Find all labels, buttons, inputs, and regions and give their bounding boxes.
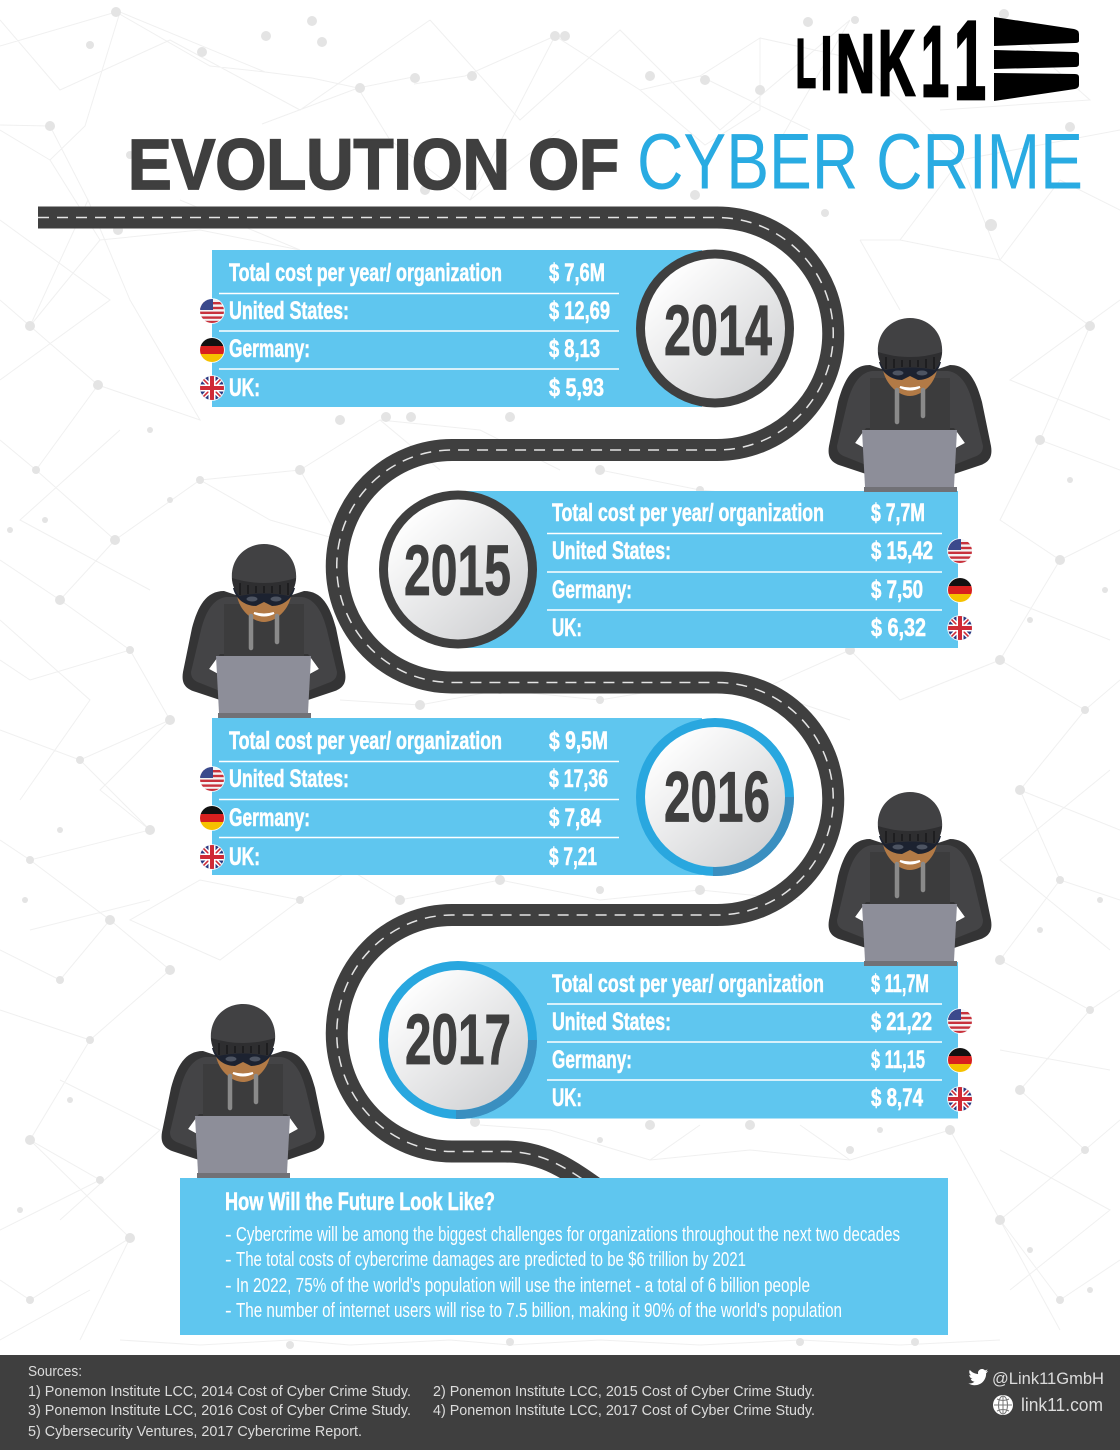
flags — [947, 538, 973, 641]
row dividers — [219, 294, 619, 369]
row: Germany — [229, 804, 601, 832]
row: UK: $ 8,74 — [871, 1084, 923, 1112]
footer — [0, 1355, 1120, 1450]
row: total: $ 11,7M — [871, 970, 929, 998]
panel background — [460, 491, 958, 648]
future panel background — [180, 1178, 948, 1335]
year badge 2014: 2014 — [664, 292, 772, 371]
row: UK: $ 7,21 — [549, 843, 597, 871]
row: UK: UK: — [229, 374, 260, 402]
panel background — [212, 718, 702, 875]
row: total: Total cost per year/ organization — [552, 499, 824, 527]
winding road — [38, 218, 833, 1195]
flags — [199, 766, 225, 870]
title — [128, 116, 1083, 206]
logo wordmark: I — [821, 21, 832, 105]
future bullets: The number of internet users will rise to 7.5 billion, making it 90% of the world's population — [236, 1300, 842, 1322]
website: link11.com — [1021, 1395, 1103, 1415]
icon: globe — [993, 1395, 1013, 1415]
row: UK: $ 5,93 — [549, 374, 604, 402]
row: UK: UK: — [229, 843, 260, 871]
row: UK — [552, 614, 926, 642]
row: United States: United States: — [552, 1008, 671, 1036]
panel: future outlook — [180, 1178, 948, 1335]
row: Germany — [552, 576, 923, 604]
year badge 2016: 2016 — [664, 758, 770, 838]
panel: 2017 — [379, 961, 973, 1119]
row: United States — [229, 297, 610, 325]
sources: 2) Ponemon Institute LCC, 2015 Cost of Cyber Crime Study. — [433, 1383, 815, 1400]
year badge 2015 — [379, 490, 537, 648]
logo: LINK 11 — [796, 0, 1079, 123]
row dividers — [219, 762, 619, 838]
logo bars — [994, 17, 1079, 101]
row: Germany: $ 11,15 — [871, 1046, 925, 1074]
panel: 2015 — [379, 490, 973, 648]
sources — [28, 1363, 815, 1440]
row: UK: UK: — [552, 1084, 582, 1112]
row: United States: United States: — [229, 297, 349, 325]
row: United States — [229, 765, 608, 793]
row: Germany: $ 7,84 — [549, 804, 601, 832]
future bullets: - — [225, 1249, 232, 1271]
footer background — [0, 1355, 1120, 1450]
row: United States: $ 17,36 — [549, 765, 608, 793]
row: UK — [229, 374, 604, 402]
panel: 2014 — [199, 250, 794, 408]
row: Germany: Germany: — [229, 804, 310, 832]
row: total: $ 7,7M — [871, 499, 925, 527]
logo wordmark: K — [878, 11, 915, 115]
future bullets: Cybercrime will be among the biggest challenges for organizations throughout the next two decades — [236, 1224, 900, 1246]
future heading: How Will the Future Look Like? — [225, 1188, 495, 1216]
sources: 5) Cybersecurity Ventures, 2017 Cybercrime Report. — [28, 1423, 362, 1440]
future bullets: - — [225, 1224, 232, 1246]
sources: 3) Ponemon Institute LCC, 2016 Cost of Cyber Crime Study. — [28, 1402, 411, 1419]
title: EVOLUTION OF — [128, 126, 619, 205]
row: total: $ 7,6M — [549, 259, 605, 287]
row: total: Total cost per year/ organization — [229, 727, 502, 755]
logo wordmark — [796, 0, 986, 123]
future bullets: - — [225, 1300, 232, 1322]
year badge 2014 — [636, 250, 794, 408]
row: Germany: Germany: — [229, 335, 310, 363]
sources: 1) Ponemon Institute LCC, 2014 Cost of Cyber Crime Study. — [28, 1383, 411, 1400]
logo wordmark: 1 — [921, 6, 949, 118]
icon: twitter — [968, 1369, 988, 1385]
row: total: Total cost per year/ organization — [229, 259, 502, 287]
row: United States: United States: — [229, 765, 349, 793]
row: total: Total cost per year/ organization — [552, 970, 824, 998]
logo wordmark: 1 — [954, 0, 986, 123]
icon: hacker 2017 — [162, 1004, 324, 1178]
future bullets: - — [225, 1275, 232, 1297]
row: United States — [552, 537, 933, 565]
row: UK: $ 6,32 — [871, 614, 926, 642]
icon: hacker 2016 — [829, 792, 991, 966]
row: United States: $ 12,69 — [549, 297, 610, 325]
year badge 2016 — [636, 718, 794, 876]
row: Germany: $ 7,50 — [871, 576, 923, 604]
row: UK: UK: — [552, 614, 582, 642]
row: United States: United States: — [552, 537, 671, 565]
year badge 2017: 2017 — [405, 1001, 511, 1080]
row: Germany: $ 8,13 — [549, 335, 600, 363]
logo wordmark: L — [796, 25, 816, 102]
icon: hacker 2014 — [829, 318, 991, 492]
row: Germany: Germany: — [552, 1046, 632, 1074]
row: Germany — [552, 1046, 925, 1074]
flags — [947, 1008, 973, 1112]
row: United States: $ 21,22 — [871, 1008, 932, 1036]
row: UK — [552, 1084, 923, 1112]
panel: 2016 — [199, 718, 794, 876]
sources: 4) Ponemon Institute LCC, 2017 Cost of Cyber Crime Study. — [433, 1402, 815, 1419]
twitter handle: @Link11GmbH — [992, 1369, 1104, 1388]
row: Germany — [229, 335, 600, 363]
sources: Sources: — [28, 1363, 82, 1380]
row: United States: $ 15,42 — [871, 537, 933, 565]
row: total: $ 9,5M — [549, 727, 608, 755]
panel background — [212, 250, 702, 407]
row: Germany: Germany: — [552, 576, 632, 604]
row dividers — [547, 534, 942, 610]
future bullets: The total costs of cybercrime damages are predicted to be $6 trillion by 2021 — [236, 1249, 746, 1271]
icon: hacker 2015 — [183, 544, 345, 718]
logo wordmark: N — [836, 17, 875, 110]
panel background — [460, 962, 958, 1118]
row: United States — [552, 1008, 932, 1036]
future bullets: In 2022, 75% of the world's population will use the internet - a total of 6 billion people — [236, 1275, 810, 1297]
future bullets — [225, 1224, 900, 1322]
row: UK — [229, 843, 597, 871]
flags — [199, 298, 225, 401]
year badge 2017 — [379, 961, 537, 1119]
row dividers — [547, 1004, 942, 1080]
year badge 2015: 2015 — [404, 532, 511, 611]
